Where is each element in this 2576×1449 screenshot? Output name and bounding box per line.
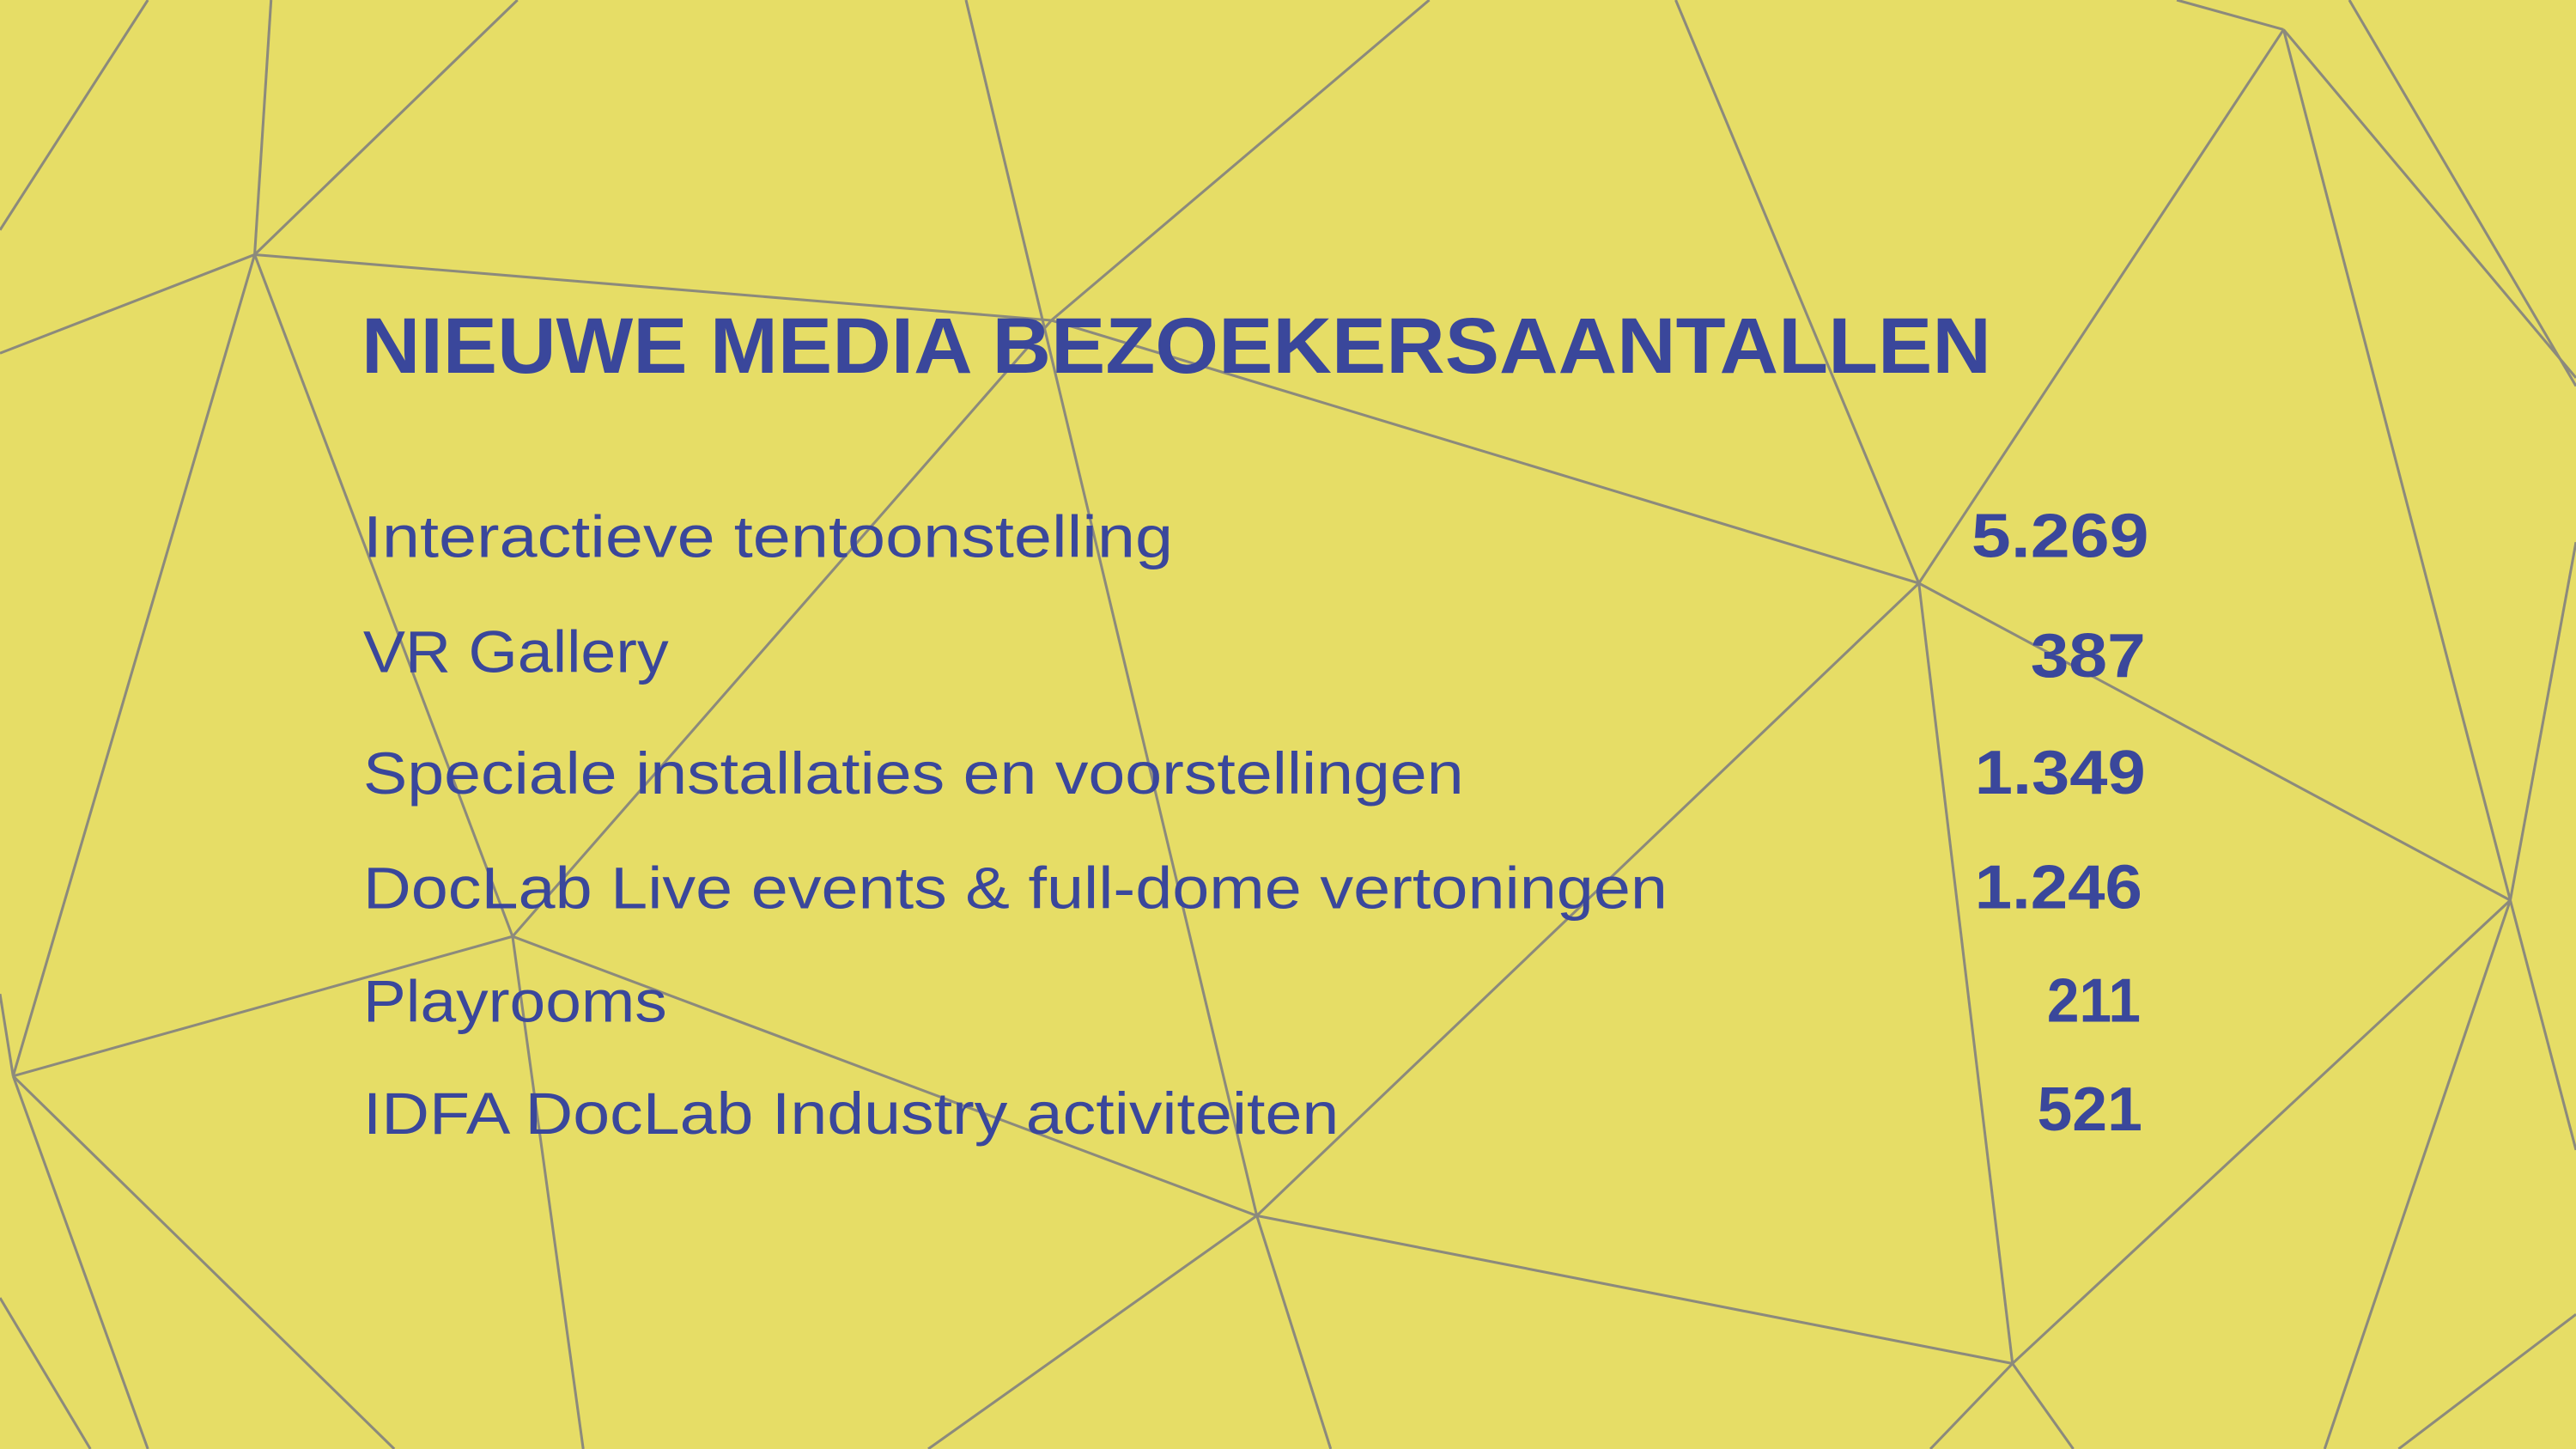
numbers xyxy=(1971,501,2149,1144)
labels: IDFA DocLab Industry activiteiten xyxy=(363,1081,1339,1147)
labels: VR Gallery xyxy=(363,618,669,685)
list of visitor counts xyxy=(363,501,2149,1147)
labels xyxy=(363,503,1668,1147)
labels: Interactieve tentoonstelling xyxy=(363,503,1173,569)
labels: Speciale installaties en voorstellingen xyxy=(363,740,1464,807)
labels: Playrooms xyxy=(363,969,667,1035)
numbers: 1.246 xyxy=(1975,853,2142,922)
numbers: 387 xyxy=(2031,621,2146,691)
numbers: 211 xyxy=(2047,966,2141,1036)
title: NIEUWE MEDIA BEZOEKERSAANTALLEN xyxy=(361,302,1991,390)
numbers: 5.269 xyxy=(1971,501,2149,570)
numbers: 521 xyxy=(2037,1075,2142,1144)
labels: DocLab Live events & full-dome vertoningen xyxy=(363,855,1668,922)
numbers: 1.349 xyxy=(1975,738,2146,807)
